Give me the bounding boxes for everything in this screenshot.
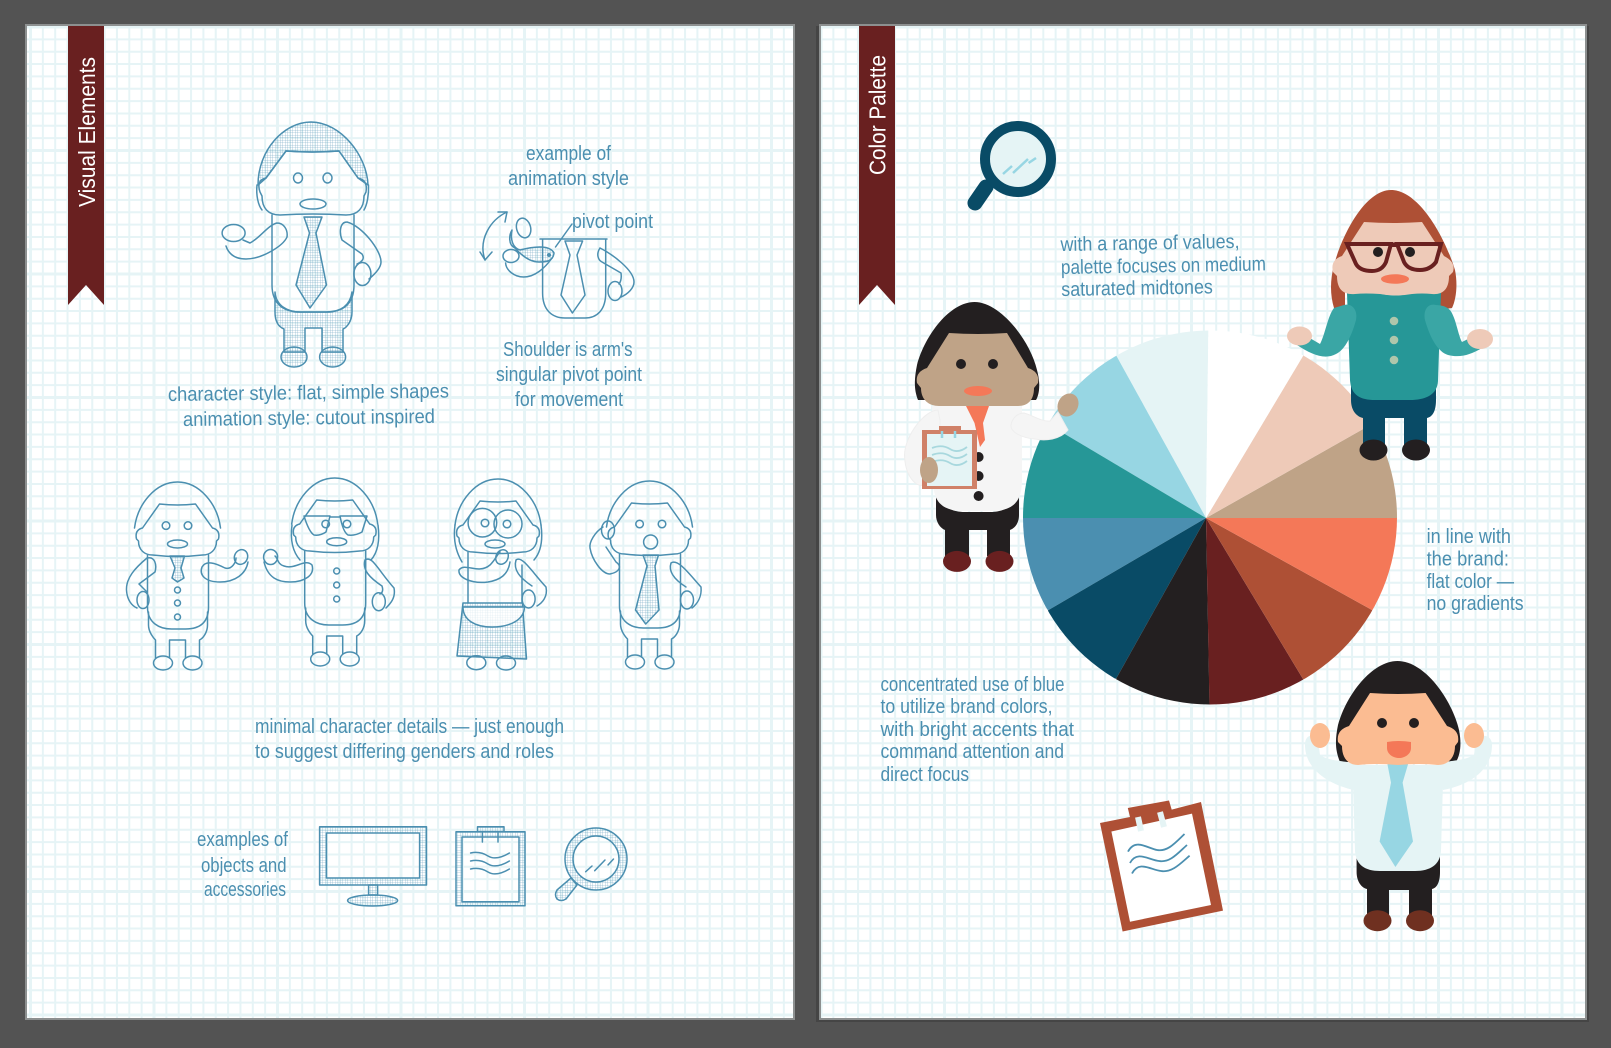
caption: example of animation style (508, 143, 629, 190)
caption: concentrated use of blue: with bright accents that (880, 719, 1074, 741)
icon: magnifier sketch (556, 828, 627, 900)
caption: character style: animation style: cutout inspired (183, 406, 435, 431)
icon: monitor sketch (320, 827, 426, 906)
character sketch: man with small tie (126, 482, 250, 670)
caption: example of animation style: example of (526, 143, 611, 165)
caption: minimal character details: minimal character details — just enough (255, 716, 564, 738)
caption: examples of objects: accessories (204, 879, 286, 901)
caption: in line with the brand: no gradients (1427, 593, 1524, 615)
caption: range of values: saturated midtones (1061, 276, 1213, 301)
panel: color palette (816, 25, 1589, 1022)
caption: in line with the brand: the brand: (1427, 548, 1509, 570)
caption: concentrated use of blue (880, 674, 1074, 786)
caption: concentrated use of blue: direct focus (880, 764, 969, 786)
caption: range of values: palette focuses on medium (1061, 253, 1266, 279)
panel: visual elements (26, 25, 794, 1019)
caption: shoulder pivot (496, 339, 642, 411)
caption: concentrated use of blue: concentrated use of blue (880, 674, 1064, 696)
character sketch: surprised man (590, 481, 701, 669)
caption: shoulder pivot: Shoulder is arm's (503, 339, 632, 361)
pivot leader line (556, 224, 572, 247)
caption: concentrated use of blue: to utilize brand colors, (880, 696, 1052, 718)
character: woman in teal (1287, 190, 1493, 460)
icon: clipboard sketch (456, 827, 525, 906)
character sketch: woman with glasses (264, 478, 394, 666)
character: cheering man (1305, 661, 1492, 931)
ribbon: color palette: Color Palette (864, 55, 890, 175)
ribbon: visual elements (68, 26, 104, 305)
icon: held clipboard (922, 426, 977, 489)
caption: minimal character details: to suggest differing genders and roles (255, 741, 554, 763)
caption: shoulder pivot: singular pivot point (496, 364, 642, 386)
caption: character style (168, 381, 449, 431)
caption: character style: character style: flat, simple shapes (168, 381, 449, 406)
caption: example of animation style: animation style (508, 168, 629, 190)
caption: examples of objects: examples of (197, 829, 288, 851)
ribbon: visual elements: Visual Elements (74, 57, 100, 207)
animation pivot sketch (480, 211, 653, 318)
caption: examples of objects: objects and (201, 855, 286, 877)
caption: range of values: with a range of values, (1059, 231, 1240, 256)
caption: concentrated use of blue: command attention and (880, 741, 1064, 763)
caption: range of values (1059, 230, 1266, 301)
arrow: rotation (480, 212, 507, 260)
main character sketch (222, 122, 381, 367)
caption: minimal character details (255, 716, 564, 763)
icon: clipboard (1100, 800, 1223, 932)
caption: in line with the brand (1427, 526, 1524, 615)
icon: magnifier (975, 126, 1051, 203)
ribbon: color palette (859, 26, 895, 305)
character sketch: woman in skirt (454, 479, 546, 670)
caption: examples of objects (197, 829, 288, 901)
character: man with clipboard (904, 302, 1083, 572)
caption: in line with the brand: in line with (1427, 526, 1511, 548)
caption: in line with the brand: flat color — (1427, 571, 1514, 593)
color wheel (1010, 320, 1400, 710)
caption: shoulder pivot: for movement (515, 389, 623, 411)
label: pivot point: pivot point (572, 211, 653, 233)
